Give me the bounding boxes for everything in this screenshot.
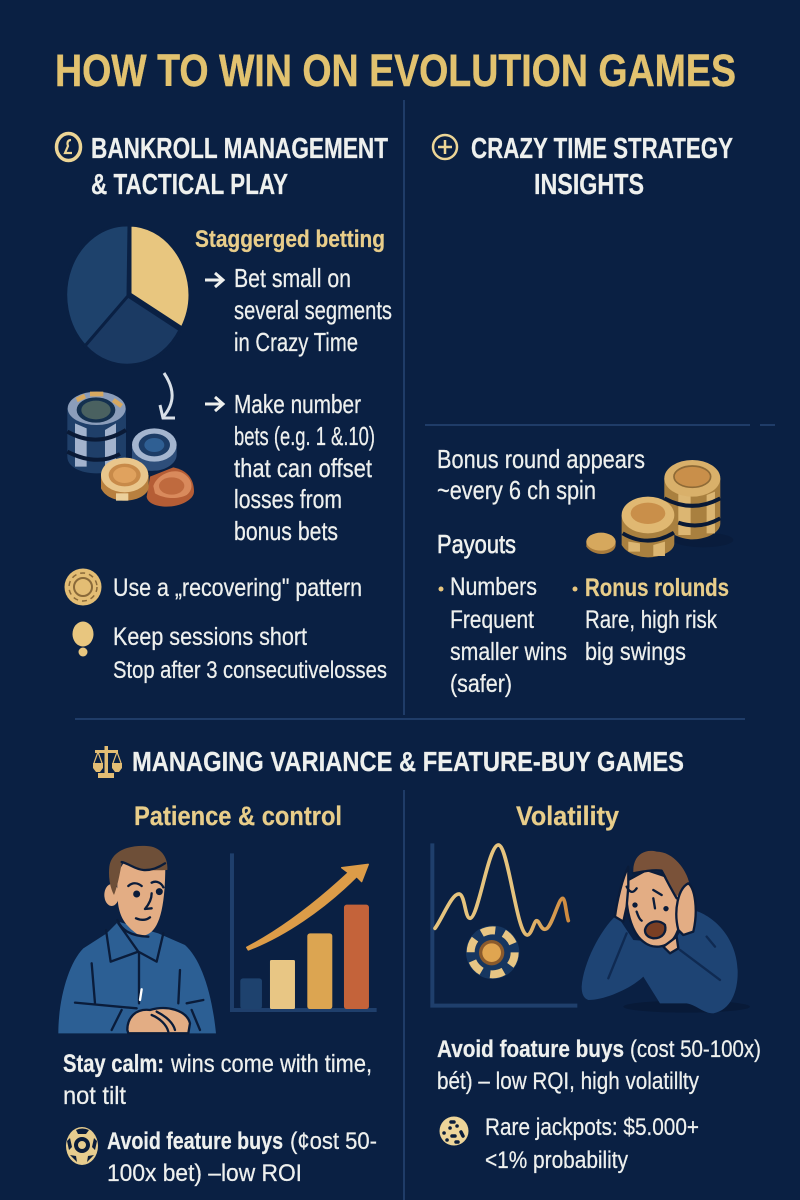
- line chart: volatility: [432, 843, 577, 1006]
- text: rare jackpots: Rare jackpots: $5.000+: [485, 1114, 699, 1141]
- column: bonus rounds: [572, 574, 729, 666]
- column: numbers: Frequent: [450, 606, 534, 634]
- illustration: stressed man: [582, 851, 750, 1013]
- column: numbers: (safer): [450, 670, 512, 698]
- text: rare jackpots: <1% probability: [485, 1147, 628, 1174]
- icon: plus circle: [433, 135, 457, 159]
- pie chart: [66, 225, 190, 365]
- arrow: second bullet: [205, 397, 223, 411]
- icon: recovering pattern coin: [64, 568, 102, 606]
- text: bet small: in Crazy Time: [234, 327, 358, 357]
- text: avoid feature buys right: bét) – low RQI, high volatillty: [437, 1068, 699, 1095]
- column: numbers: Numbers: [450, 573, 537, 601]
- icon: light bulb: [72, 622, 94, 656]
- text: avoid feature buys left: Avoid feature buys: [107, 1128, 283, 1155]
- text: avoid feature buys right: Avoid foature buys: [437, 1036, 624, 1063]
- text: bonus round frequency: ~every 6 ch spin: [437, 475, 596, 505]
- text: number bets: bets (e.g. 1 &.10): [234, 421, 375, 451]
- heading: staggered betting: Staggerged betting: [195, 226, 385, 253]
- icon: gold chip stacks: [586, 460, 733, 557]
- arrow: first bullet: [205, 273, 223, 287]
- heading: volatility: Volatility: [516, 801, 619, 831]
- bar chart: growth: [232, 853, 377, 1010]
- text: stop after losses: Stop after 3 consecutivelosses: [113, 657, 387, 684]
- text: stay calm: wins come with time,: [170, 1050, 372, 1078]
- column: numbers: [438, 573, 567, 698]
- arrow: curved down: [160, 373, 175, 418]
- icon: scales: [93, 746, 122, 778]
- text: stay calm: not tilt: [63, 1082, 126, 1110]
- column: bonus rounds: Rare, high risk: [585, 606, 717, 634]
- column: bonus rounds: Ronus rolunds: [585, 574, 729, 602]
- icon: poker chips: [67, 392, 194, 507]
- arrow: upward trend: [247, 864, 368, 950]
- text: avoid feature buys left: 100x bet) –low ROI: [107, 1160, 302, 1187]
- heading: bankroll management: & TACTICAL PLAY: [91, 169, 288, 201]
- text: bet small: several segments: [234, 295, 392, 325]
- illustration: calm man: [58, 846, 216, 1033]
- text: stay calm: Stay calm:: [63, 1050, 164, 1078]
- icon: soccer-style chip: [66, 1127, 98, 1165]
- column: numbers: smaller wins: [450, 638, 567, 666]
- heading: crazy time strategy: INSIGHTS: [534, 169, 644, 201]
- text: bet small: Bet small on: [234, 263, 351, 293]
- text: number bets: bonus bets: [234, 516, 338, 546]
- text: bonus round frequency: Bonus round appears: [437, 444, 645, 474]
- icon: chip: [466, 926, 519, 979]
- text: number bets: losses from: [234, 484, 342, 514]
- heading: managing variance: MANAGING VARIANCE & FEATURE-BUY GAMES: [132, 746, 684, 777]
- icon: dotted chip: [440, 1116, 468, 1146]
- text: number bets: that can offset: [234, 453, 373, 483]
- panel: crazy time strategy: [433, 133, 733, 698]
- text: recovering pattern: Use a „recovering" pattern: [113, 574, 362, 602]
- panel: bankroll management: [56, 133, 392, 684]
- panel: managing variance: [58, 746, 761, 1187]
- icon: coin: [56, 134, 80, 160]
- text: avoid feature buys right: (cost 50-100x): [630, 1036, 761, 1063]
- heading: patience and control: Patience & control: [134, 801, 342, 831]
- heading: bankroll management: BANKROLL MANAGEMENT: [91, 133, 388, 165]
- text: avoid feature buys left: (¢ost 50-: [290, 1128, 377, 1155]
- text: keep sessions short: Keep sessions short: [113, 623, 307, 651]
- text: number bets: Make number: [234, 389, 361, 419]
- heading: payouts: Payouts: [437, 529, 516, 559]
- column: bonus rounds: big swings: [585, 638, 686, 666]
